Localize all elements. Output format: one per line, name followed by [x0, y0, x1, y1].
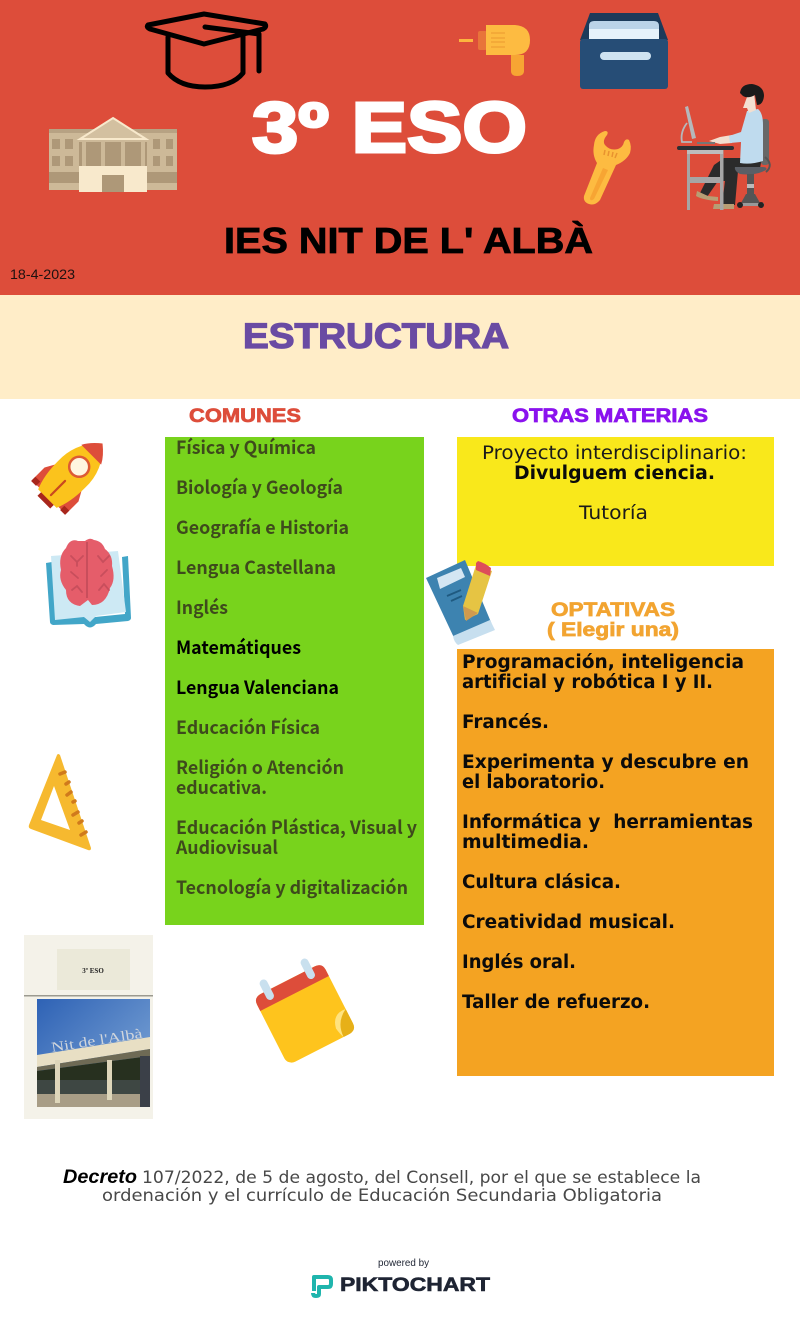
icon: person at desk — [677, 84, 770, 210]
icon: drill — [459, 25, 530, 76]
panel: optativas: Cultura clásica. — [462, 872, 621, 893]
panel: comunes — [165, 434, 424, 925]
icon: notebook and pencil — [426, 560, 495, 645]
panel: school photo card — [24, 935, 153, 1119]
panel: optativas: Creatividad musical. — [462, 912, 675, 933]
panel: comunes: Geografía e Historia — [176, 514, 349, 540]
panel: optativas — [457, 649, 774, 1076]
panel: optativas: el laboratorio. — [462, 772, 605, 793]
panel: otras materias: Tutoría — [578, 503, 648, 524]
heading: comunes: COMUNES — [189, 406, 301, 427]
panel: otras materias — [457, 437, 774, 566]
set square ticks — [60, 772, 86, 835]
panel: optativas: Taller de refuerzo. — [462, 992, 650, 1013]
date: 18-4-2023 — [10, 266, 75, 282]
panel: optativas: multimedia. — [462, 832, 589, 853]
panel: comunes: Educación Plástica, Visual y — [176, 814, 418, 840]
icon: rocket — [27, 427, 119, 519]
panel: otras materias: Proyecto interdisciplinario: — [482, 443, 747, 464]
decree note: Decreto — [63, 1167, 137, 1188]
section heading: ESTRUCTURA — [243, 317, 509, 356]
panel: comunes: educativa. — [176, 774, 267, 800]
title: 3º ESO — [252, 89, 527, 168]
panel: comunes: Tecnología y digitalización — [176, 874, 408, 900]
panel: otras materias: Divulguem ciencia. — [514, 463, 715, 484]
footer: piktochart logo — [313, 1258, 490, 1296]
panel: optativas: Inglés oral. — [462, 952, 576, 973]
panel: comunes: Matemátiques — [176, 634, 301, 660]
panel: comunes: Inglés — [176, 594, 228, 620]
panel: optativas: Experimenta y descubre en — [462, 752, 749, 773]
panel: comunes: Lengua Castellana — [176, 554, 336, 580]
icon: set square — [29, 754, 91, 850]
icon: school building — [49, 118, 177, 192]
panel: optativas: Programación, inteligencia — [462, 652, 744, 673]
footer: piktochart logo: PIKTOCHART — [340, 1275, 490, 1296]
heading: optativas — [547, 600, 679, 641]
panel: school photo card: Nit de l'Albà — [50, 1027, 144, 1056]
decree note: 107/2022, de 5 de agosto, del Consell, por el que se establece la — [142, 1168, 701, 1188]
panel: comunes: Física y Química — [176, 434, 316, 460]
panel: school photo card: 3º ESO — [82, 967, 104, 975]
icon: calendar — [248, 952, 357, 1065]
icon: book with brain — [46, 539, 131, 628]
panel: optativas: Informática y herramientas — [462, 812, 753, 833]
panel: comunes: Educación Física — [176, 714, 320, 740]
panel: comunes: Biología y Geología — [176, 474, 343, 500]
icon: graduation cap — [147, 14, 266, 87]
icon: file drawer — [580, 13, 668, 89]
section band — [0, 295, 800, 399]
panel: optativas: artificial y robótica I y II. — [462, 672, 713, 693]
panel: comunes: Audiovisual — [175, 834, 278, 860]
decree note — [63, 1167, 701, 1206]
decree note: ordenación y el currículo de Educación Secundaria Obligatoria — [102, 1186, 662, 1206]
icon: wrench — [584, 131, 631, 204]
heading: optativas: OPTATIVAS — [551, 600, 675, 621]
footer: piktochart logo: powered by — [378, 1258, 429, 1269]
panel: optativas: Francés. — [462, 712, 549, 733]
panel: comunes: Lengua Valenciana — [176, 674, 339, 700]
heading: otras materias: OTRAS MATERIAS — [512, 406, 708, 427]
school name: IES NIT DE L' ALBÀ — [224, 220, 593, 261]
heading: optativas: ( Elegir una) — [547, 620, 679, 641]
panel: comunes: Religión o Atención — [176, 754, 344, 780]
header panel — [0, 0, 800, 295]
